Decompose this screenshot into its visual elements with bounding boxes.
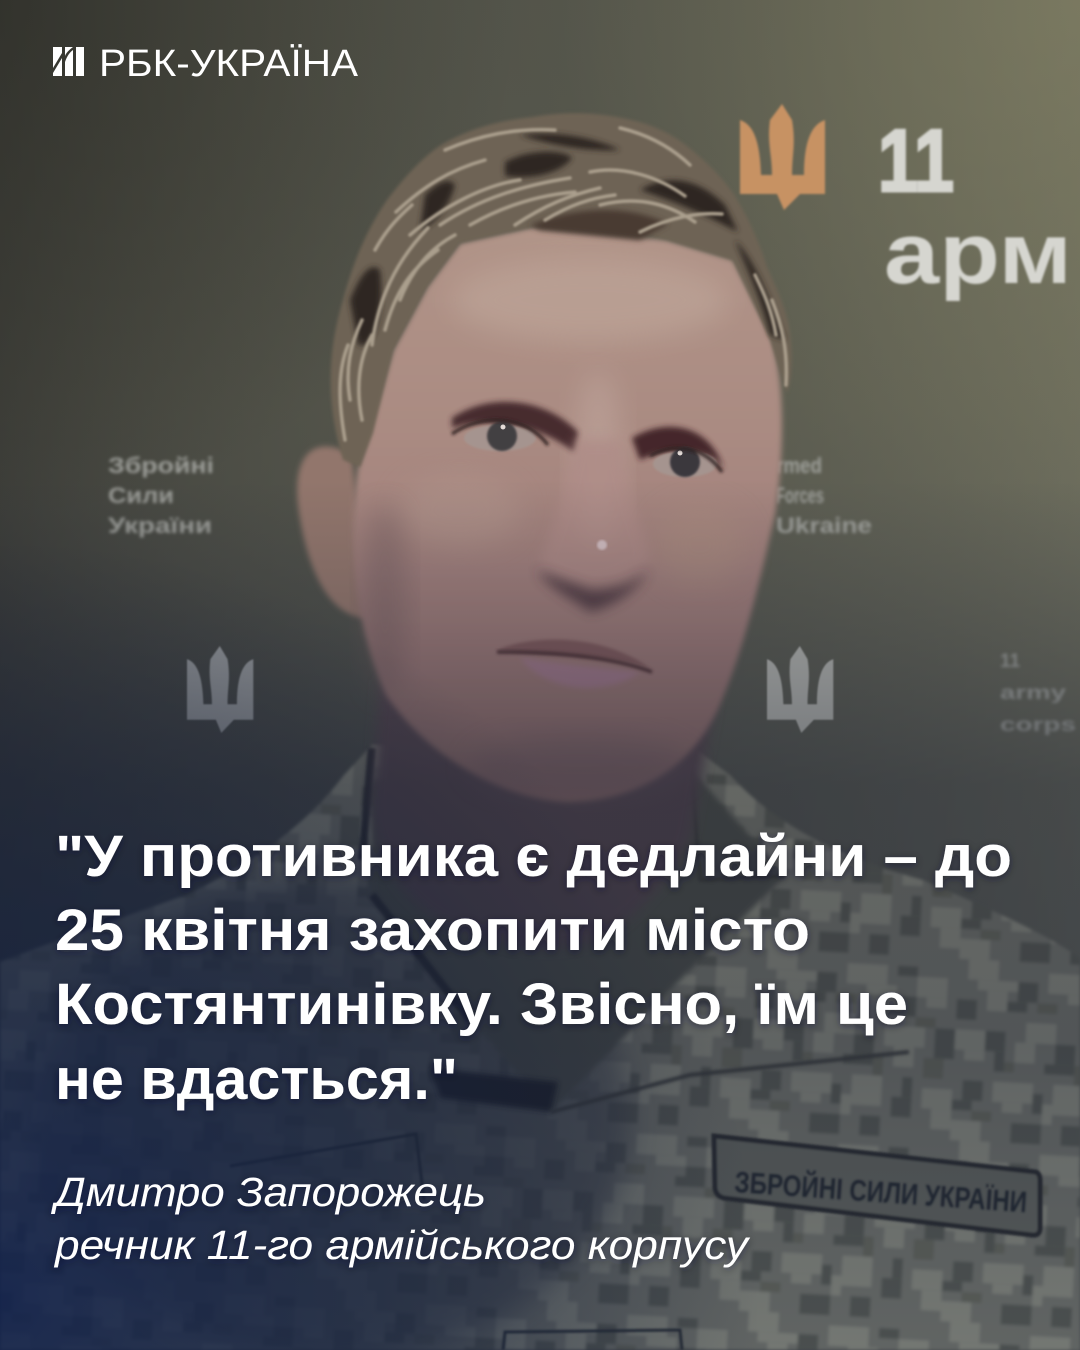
- wall lettering: small captions: army: [1000, 683, 1067, 704]
- wall lettering: small captions: Forces: [776, 483, 824, 508]
- author attribution: Дмитро Запорожець: [51, 1169, 486, 1215]
- photo: left eye and brow: [452, 402, 578, 452]
- photo: nose: [537, 440, 650, 612]
- quote: "У противника є дедлайни – до: [55, 824, 1012, 889]
- wall lettering: 11 арм: [878, 111, 1072, 302]
- wall lettering: small captions: Збройні: [108, 453, 214, 478]
- photo: face shading: [363, 258, 745, 795]
- hair: thin strands: [340, 128, 786, 440]
- dim center-left of uniform: [30, 880, 630, 1350]
- logo wordmark: РБК-УКРАЇНА: [99, 43, 359, 85]
- wall lettering: 11 арм: арм: [884, 206, 1072, 302]
- collar edge right: [551, 758, 909, 1112]
- uniform chest patch: [714, 1136, 1040, 1235]
- dark navy gradient overlays: [0, 480, 1080, 1350]
- quote: 25 квітня захопити місто: [55, 898, 810, 963]
- wall emblem: right trident: [767, 646, 833, 733]
- logo: [53, 43, 359, 85]
- wall lettering: small captions: Ukraine: [776, 513, 872, 538]
- wall lettering: small captions: 11: [1000, 651, 1021, 672]
- wall emblem: left trident: [187, 646, 253, 733]
- wall emblem: orange trident: [740, 104, 825, 210]
- collar edge left: [362, 748, 470, 1020]
- collar shadow left: [430, 1068, 558, 1112]
- wall lettering: small captions: corps: [1000, 715, 1076, 736]
- photo: uniform torso: [0, 745, 1080, 1350]
- logo mark: [53, 47, 84, 76]
- wall lettering: 11 арм: 11: [878, 111, 954, 210]
- wall lettering: small captions: [108, 453, 1076, 736]
- wall lettering: small captions: України: [108, 513, 212, 538]
- author attribution: [51, 1169, 751, 1268]
- photo: mouth: [497, 639, 652, 688]
- quote: Костянтинівку. Звісно, їм це: [55, 972, 908, 1037]
- wall lettering: small captions: Сили: [108, 483, 174, 508]
- uniform left chest pocket: [230, 1134, 682, 1350]
- photo: right eye and brow: [632, 427, 724, 477]
- photo: left ear: [297, 447, 368, 618]
- hair: dark tufts: [350, 134, 785, 345]
- quote: не вдасться.": [55, 1047, 458, 1112]
- t-shirt opening: [372, 770, 785, 1112]
- wall lettering: small captions: rmed: [776, 453, 822, 478]
- photo: neck: [372, 680, 715, 948]
- quote: [55, 824, 1012, 1112]
- photo: hair: [331, 113, 792, 467]
- photo: face: [353, 227, 782, 802]
- author attribution: речник 11-го армійського корпусу: [53, 1222, 751, 1268]
